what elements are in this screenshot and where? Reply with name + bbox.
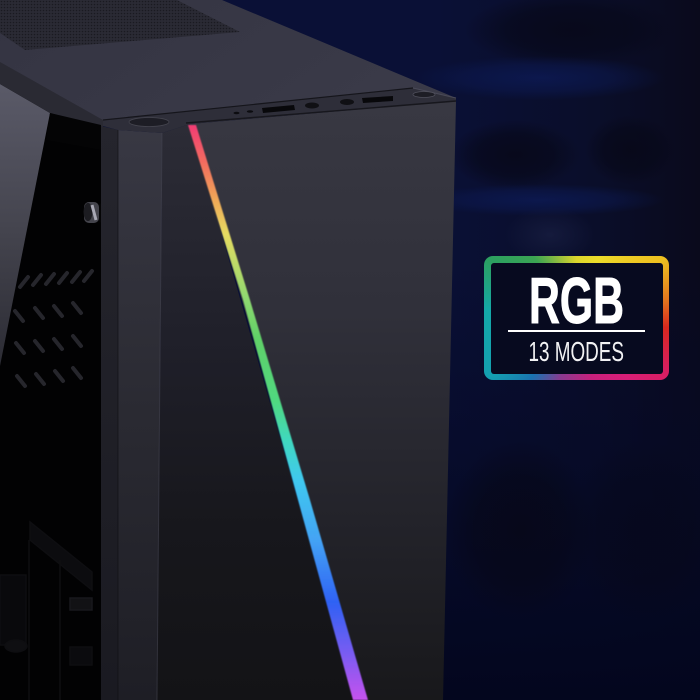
interior: PSU shroud vent slots: [15, 271, 92, 386]
LED dots: [234, 112, 240, 114]
glass side panel: black interior: [0, 60, 101, 700]
top I/O bezel: [103, 88, 456, 133]
case top surface: [0, 0, 456, 128]
top mesh vent: [0, 0, 240, 50]
left pillar: [118, 130, 162, 700]
glass top frame: [0, 62, 103, 128]
front panel: [101, 101, 456, 700]
pillar highlights: [157, 133, 162, 700]
RGB badge: [484, 256, 669, 380]
thumb screw: [84, 202, 107, 223]
interior: faint lower hardware: [0, 522, 92, 700]
audio jack right: [340, 99, 354, 105]
badge text: 13 MODES: [528, 336, 624, 367]
reset button: [413, 92, 435, 98]
power button: [129, 118, 169, 126]
main face right of the light strip: [190, 101, 456, 700]
RGB light strip: [188, 125, 368, 700]
side strip: [101, 126, 118, 700]
badge inner panel: [491, 263, 663, 374]
black interior corner below frame: [46, 113, 101, 150]
dark facet left of the light strip: [157, 124, 355, 700]
audio jack left: [305, 102, 319, 108]
badge text: [508, 264, 645, 367]
USB port left: [262, 105, 295, 113]
glass reflection: [0, 84, 50, 366]
USB port right: [362, 96, 393, 103]
